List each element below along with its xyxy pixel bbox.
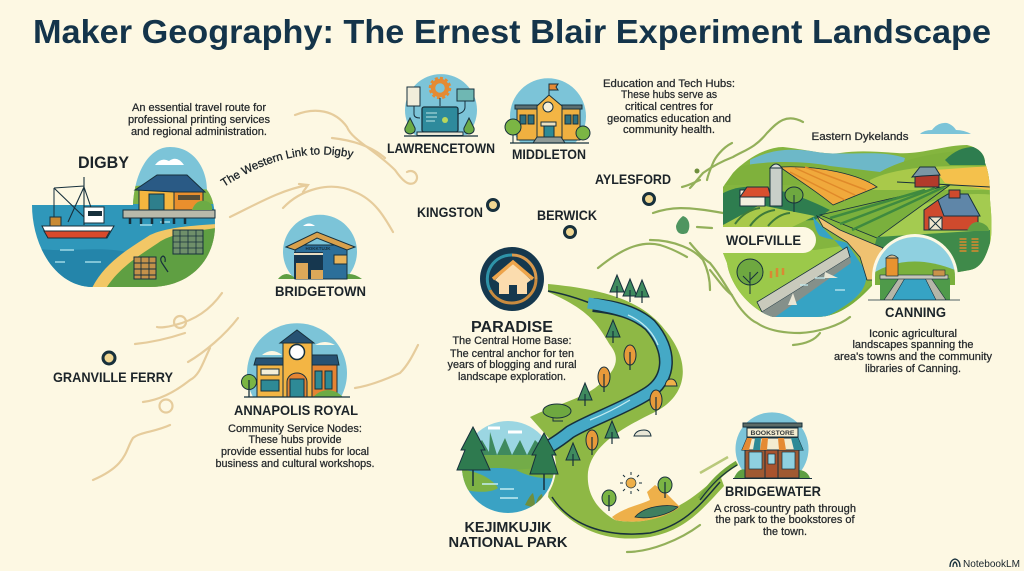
icon: wheat [963,238,975,252]
icon: home base badge [480,247,544,311]
icon: Canning sluice [868,234,960,302]
text: Digby description: An essential travel route for [132,102,266,114]
icon: community hall [242,323,350,397]
text: Digby description [128,102,270,138]
icon: lake and forest [457,419,558,520]
icon: white farmhouse and silo [740,164,803,212]
river [548,291,595,305]
icon: tree [737,259,783,294]
icon: laptop and data [404,74,478,136]
marker: Berwick: BERWICK [537,207,597,223]
panel: Annapolis Royal [216,323,374,470]
trail dark line [552,482,720,534]
text: central home base: The central anchor for ten [450,348,574,360]
icon: bookstore: BOOKSTORE [750,430,795,437]
label: GRANVILLE FERRY: GRANVILLE FERRY [53,369,174,385]
panel: Eastern Dykelands [720,123,995,375]
text: education and tech hubs: Education and Tech Hubs: [603,78,735,90]
label: LAWRENCETOWN: LAWRENCETOWN [387,140,495,156]
panel: Bridgetown [275,215,366,299]
marker: Aylesford [595,171,671,204]
text: agricultural landscapes: area's towns and the community [834,351,992,363]
text: community service nodes: Community Service Nodes: [228,423,362,435]
route lines: eastern green paths [598,118,850,552]
text: Digby description: and regional administration. [131,126,267,138]
title: Maker Geography: The Ernest Blair Experiment Landscape [33,13,991,50]
text: cross-country path: the park to the bookstores of [716,514,855,526]
illustration: dykeland landscape [720,140,995,325]
text: community service nodes: These hubs provide [248,434,342,446]
panel: Middleton [505,78,590,162]
icon: harbour building on pier [123,175,215,224]
icon: small barn [912,167,940,187]
text: cross-country path: A cross-country path through [714,503,856,515]
panel: Granville Ferry [53,352,174,385]
label: WOLFVILLE: WOLFVILLE [726,232,801,248]
label: BRIDGEWATER: BRIDGEWATER [725,483,821,499]
text: education and tech hubs [603,78,735,136]
label: Eastern Dykelands: Eastern Dykelands [812,131,909,143]
trees [543,275,677,511]
text: education and tech hubs: These hubs serve as [621,89,717,101]
text: agricultural landscapes [834,328,992,375]
marker: Aylesford: AYLESFORD [595,171,671,187]
marker: Kingston: KINGSTON [417,204,483,220]
text: central home base [448,335,576,383]
icon: lobster traps [134,230,203,279]
icon: cloud [920,123,971,134]
text: community service nodes [216,423,374,470]
route lines: western tan paths [93,111,418,480]
curved label: The Western Link to Digby: The Western Link to Digby [220,146,354,186]
ground mound [612,485,680,522]
icon: Digby harbour scene [30,102,270,294]
text: central home base: years of blogging and rural [448,359,576,371]
text: agricultural landscapes: libraries of Canning. [865,363,961,375]
label: DIGBY: DIGBY [78,153,130,172]
label: KEJIMKUJIK NATIONAL PARK: NATIONAL PARK [448,534,568,551]
illustration: river trail through the park [530,275,724,539]
text: community service nodes: business and cultural workshops. [216,458,374,470]
icon: workshop building: HOKKTUJK [305,246,331,251]
label: MIDDLETON: MIDDLETON [512,146,586,162]
text: central home base: The Central Home Base: [452,335,572,347]
panel: Lawrencetown [387,74,495,156]
icon: red barn [924,190,989,231]
trail tail lines to Bridgewater [700,457,737,500]
text: cross-country path: the town. [763,526,807,538]
text: education and tech hubs: geomatics education and [607,113,731,125]
text: community service nodes: provide essential hubs for local [221,446,369,458]
icon: sun [620,472,642,494]
label: BRIDGETOWN: BRIDGETOWN [275,283,366,299]
label: KEJIMKUJIK NATIONAL PARK: KEJIMKUJIK [464,519,552,536]
label: WOLFVILLE [723,227,816,253]
text: cross-country path [714,503,856,538]
text: education and tech hubs: critical centres for [625,101,713,113]
panel: Paradise [448,247,576,383]
icon: school building [505,78,590,143]
icon: bookstore [733,412,812,478]
label: CANNING: CANNING [885,304,946,320]
label: PARADISE: PARADISE [471,319,553,336]
text: agricultural landscapes: landscapes spanning the [852,339,974,351]
watermark: NotebookLM: NotebookLM [963,559,1020,570]
icon: fishing boat [42,177,114,238]
text: Digby description: professional printing services [128,114,270,126]
text: central home base: landscape exploration. [458,371,566,383]
marker: Berwick [537,207,597,238]
text: education and tech hubs: community health. [623,124,715,136]
green land shape [530,284,724,539]
label: ANNAPOLIS ROYAL: ANNAPOLIS ROYAL [234,402,358,418]
text: agricultural landscapes: Iconic agricultural [869,328,957,340]
icon: location dot [103,352,115,364]
label: KEJIMKUJIK NATIONAL PARK [448,519,568,551]
panel: Bridgewater [714,412,856,538]
panel: Kejimkujik National Park [448,419,568,551]
